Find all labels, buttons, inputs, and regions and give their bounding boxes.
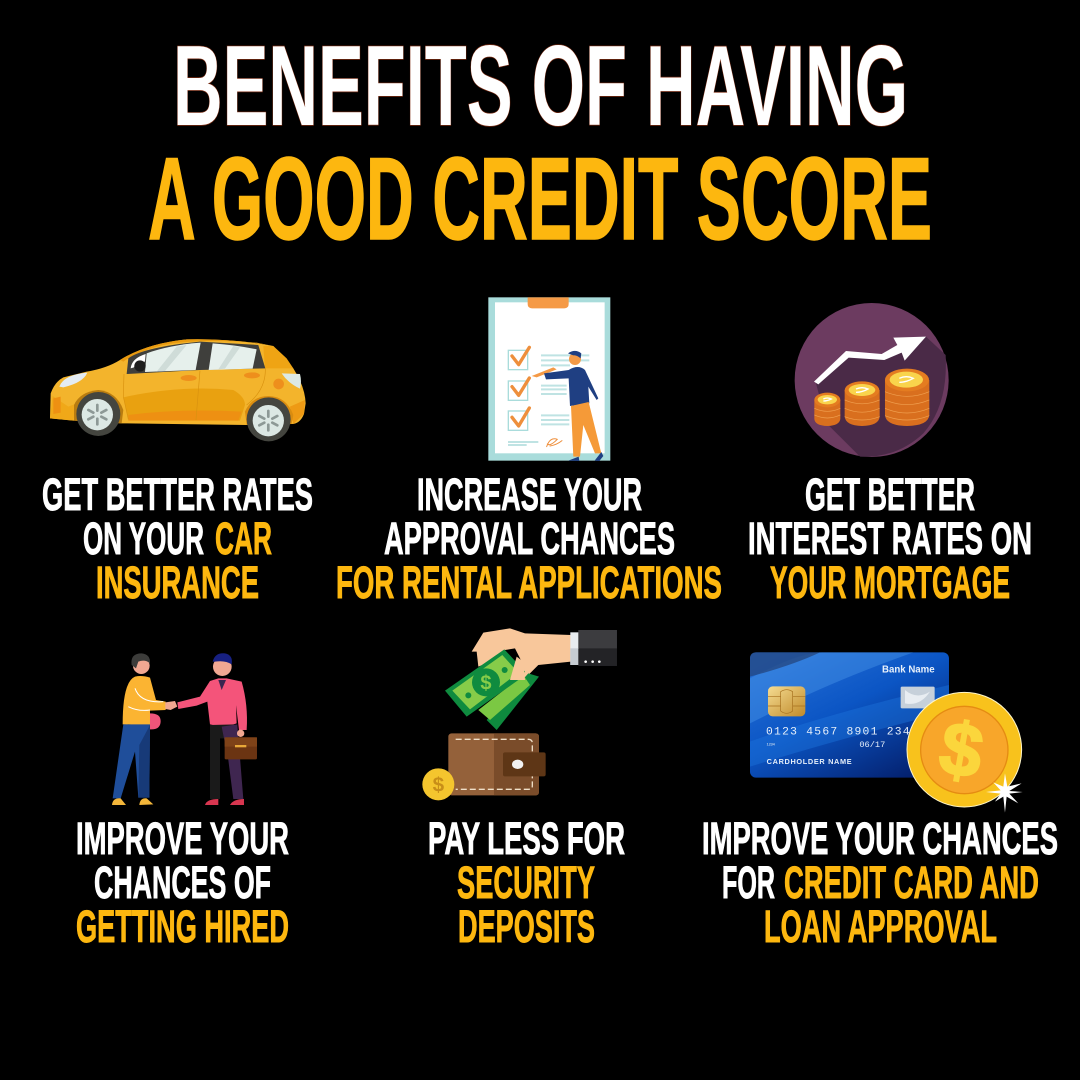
text: rental applications: FOR RENTAL APPLICATIONS xyxy=(336,557,722,608)
icon: credit card with gold coin: CARDHOLDER NAME xyxy=(767,757,852,766)
text: credit card and loan approval: FOR xyxy=(722,857,775,908)
text: getting hired: IMPROVE YOUR xyxy=(76,813,289,864)
text: getting hired: GETTING HIRED xyxy=(76,901,289,952)
panel: mortgage xyxy=(748,303,1032,608)
title xyxy=(148,23,932,264)
text: getting hired xyxy=(76,813,289,952)
text: security deposits xyxy=(428,813,625,952)
text: security deposits: PAY LESS FOR xyxy=(428,813,625,864)
icon: credit card with gold coin: Bank Name xyxy=(882,665,935,676)
text: rental applications xyxy=(336,469,722,608)
icon: hand dropping cash into wallet: $ xyxy=(433,774,445,797)
icon: hand dropping cash into wallet: $ xyxy=(480,673,492,695)
text: rental applications: APPROVAL CHANCES xyxy=(384,513,675,564)
panel: credit card and loan approval xyxy=(702,652,1058,952)
icon: clipboard checklist with man xyxy=(488,297,610,461)
icon: credit card with gold coin: 1234 xyxy=(767,743,776,747)
icon: hand dropping cash into wallet xyxy=(422,628,617,800)
icon: credit card with gold coin: 06/17 xyxy=(859,740,885,750)
text: mortgage xyxy=(748,469,1032,608)
text: car insurance: CAR xyxy=(215,513,272,564)
icon: credit card with gold coin xyxy=(750,652,1023,813)
panel: security deposits xyxy=(422,628,625,952)
icon: two people shaking hands xyxy=(112,653,257,805)
text: car insurance: INSURANCE xyxy=(96,557,259,608)
text: security deposits: DEPOSITS xyxy=(458,901,595,952)
icon: credit card with gold coin: 0123 4567 8901 2345 xyxy=(766,726,918,738)
text: rental applications: INCREASE YOUR xyxy=(417,469,642,520)
panel: getting hired xyxy=(76,653,289,952)
text: credit card and loan approval xyxy=(702,813,1058,952)
icon: credit card with gold coin: $ xyxy=(934,705,989,795)
icon: rising coin stacks xyxy=(795,303,949,457)
text: car insurance: GET BETTER RATES xyxy=(42,469,313,520)
icon: yellow car xyxy=(50,339,306,441)
text: security deposits: SECURITY xyxy=(457,857,595,908)
text: car insurance: ON YOUR xyxy=(83,513,204,564)
panel: car insurance xyxy=(42,339,313,608)
panel: rental applications xyxy=(336,297,722,608)
text: car insurance xyxy=(42,469,313,608)
text: getting hired: CHANCES OF xyxy=(94,857,271,908)
